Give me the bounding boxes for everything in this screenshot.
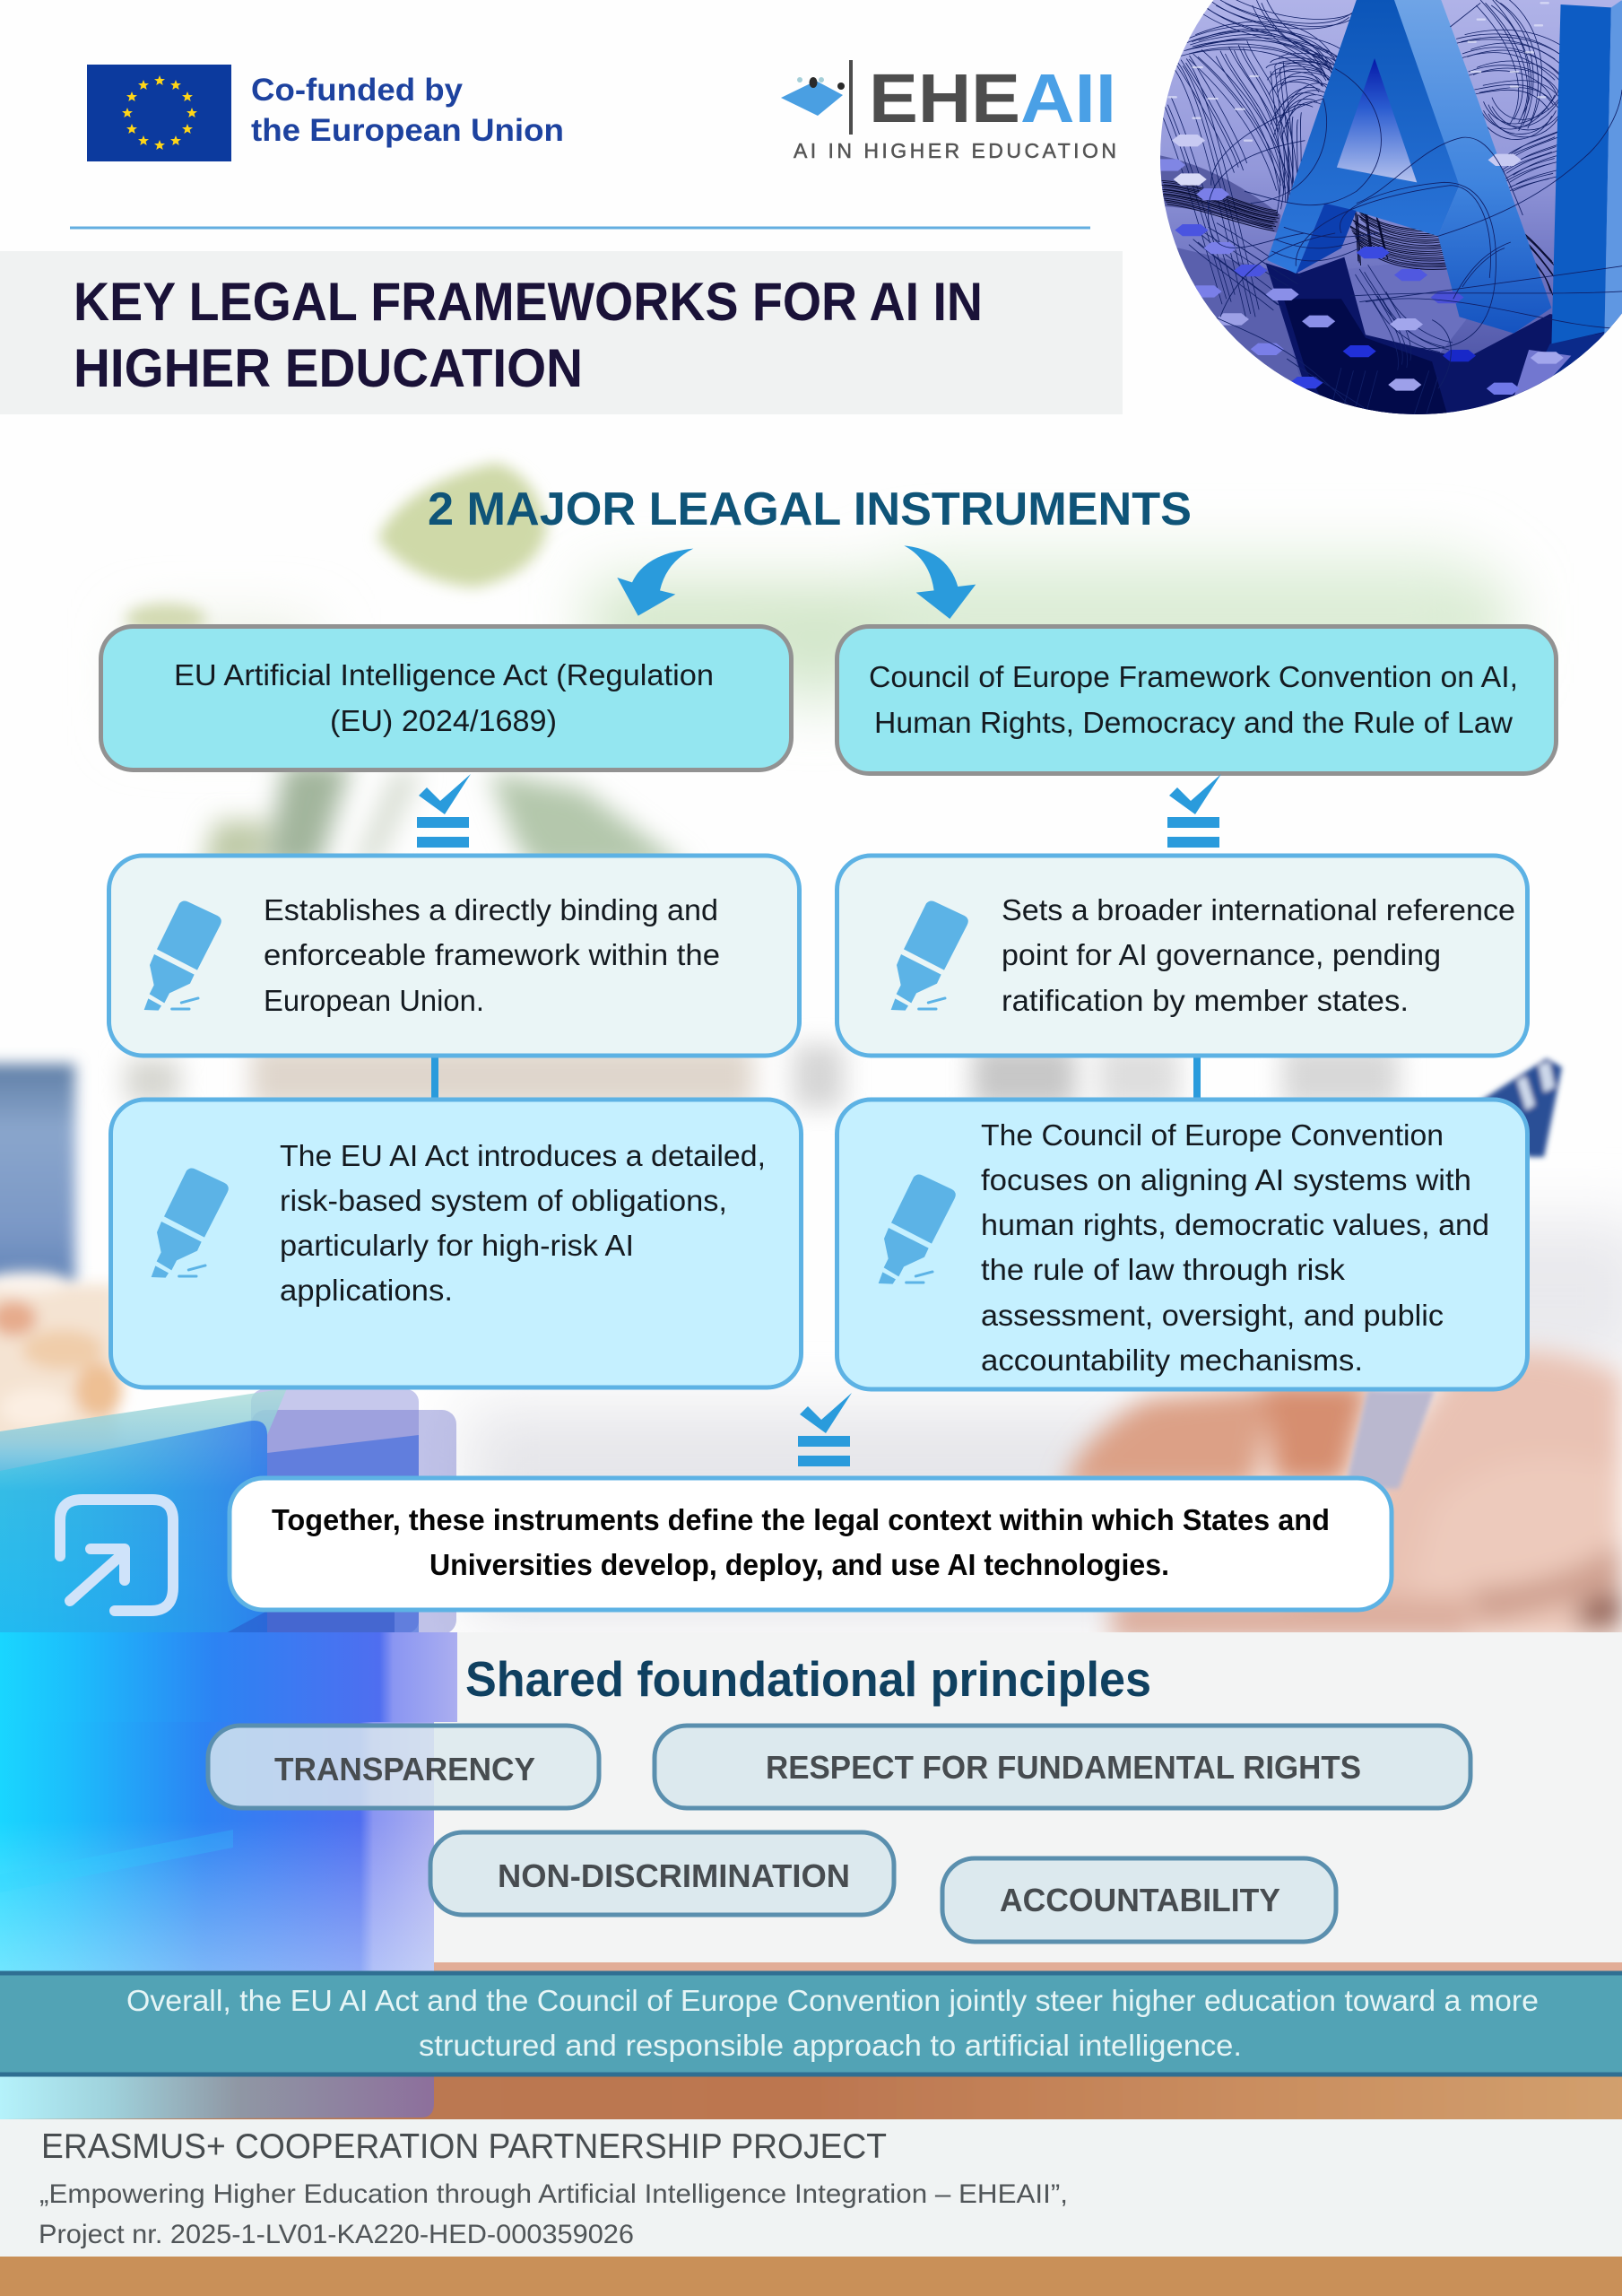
decorative blue gradient panel	[0, 1388, 457, 2119]
pill: accountability	[942, 1858, 1336, 1942]
text: The Council of Europe Convention	[981, 1118, 1444, 1152]
text: Sets a broader international reference	[1002, 893, 1515, 926]
wordmark: EHE	[869, 60, 1020, 137]
text: the rule of law through risk	[981, 1253, 1346, 1286]
left letter A	[1267, 0, 1460, 274]
text: risk-based system of obligations,	[280, 1184, 727, 1217]
panel: shared principles backdrop	[0, 1632, 1622, 1962]
panel: Council of Europe Convention	[837, 626, 1557, 773]
icon: highlighter	[144, 900, 221, 1011]
banner: overall conclusion: Overall, the EU AI Act and the Council of Europe Convention jointly steer higher education toward a more	[126, 1984, 1539, 2017]
text: European Union.	[264, 984, 484, 1017]
connector left	[431, 1057, 438, 1100]
pill: non-discrimination	[430, 1832, 894, 1915]
background: wooden desk strip	[6, 1962, 1622, 2119]
panel: EU risk-based system	[111, 1100, 802, 1387]
panel: Council reference point	[837, 856, 1528, 1056]
arrow: to EU AI Act	[617, 549, 693, 616]
tagline: AI IN HIGHER EDUCATION	[794, 139, 1116, 162]
icon: arrow in rounded square	[60, 1500, 173, 1611]
dark band and floor	[1159, 155, 1280, 233]
flowing wire lines over letters	[1208, 3, 1622, 419]
icon: check equals left	[417, 774, 471, 848]
hexagon dots	[1152, 135, 1564, 395]
arrow: to Council of Europe Convention	[904, 545, 976, 619]
wordmark: AII	[1020, 60, 1116, 137]
text: accountability mechanisms.	[981, 1344, 1363, 1377]
text: assessment, oversight, and public	[981, 1299, 1444, 1332]
text	[1002, 893, 1515, 1017]
background: blue mug	[0, 1064, 75, 1283]
banner: overall conclusion: structured and responsible approach to artificial intelligence.	[419, 2029, 1242, 2062]
panel: EU AI Act: EU Artificial Intelligence Act (Regulation	[174, 658, 714, 691]
circular AI image	[1152, 0, 1622, 424]
heading: 2 major instruments: 2 MAJOR LEAGAL INSTRUMENTS	[428, 483, 1192, 535]
footer panel: project information	[0, 2119, 1622, 2257]
footer panel: project information: „Empowering Higher Education through Artificial Intelligence Integration – EHEAII”,	[39, 2179, 1068, 2209]
pill: non-discrimination: NON-DISCRIMINATION	[498, 1857, 850, 1894]
text: particularly for high-risk AI	[280, 1229, 634, 1262]
text	[280, 1139, 766, 1307]
text: enforceable framework within the	[264, 938, 720, 971]
panel: EU AI Act	[100, 626, 791, 770]
divider	[70, 226, 1090, 230]
callout: legal context	[230, 1478, 1392, 1610]
logo: EHEAII	[781, 60, 1116, 162]
panel: EU binding framework	[109, 856, 800, 1056]
callout: legal context: Universities develop, deploy, and use AI technologies.	[429, 1548, 1169, 1581]
panel: Council of Europe Convention: Council of Europe Framework Convention on AI,	[869, 660, 1518, 693]
text	[264, 893, 720, 1017]
title: HIGHER EDUCATION	[74, 338, 583, 398]
pill: respect for fundamental rights	[655, 1726, 1470, 1808]
text: focuses on aligning AI systems with	[981, 1163, 1471, 1196]
title: KEY LEGAL FRAMEWORKS FOR AI IN	[74, 272, 983, 332]
background: writing hand	[1063, 1351, 1622, 1641]
icon: highlighter	[879, 1174, 956, 1284]
background: pastry	[0, 1272, 122, 1446]
panel: Council human rights focus	[837, 1100, 1528, 1389]
EU flag	[87, 65, 231, 161]
pill: accountability: ACCOUNTABILITY	[1000, 1882, 1280, 1918]
background: pen	[1345, 1058, 1562, 1489]
logo: EU flag with co-funded label	[87, 65, 564, 161]
icon: check equals right	[1167, 774, 1221, 848]
text: Establishes a directly binding and	[264, 893, 718, 926]
icon: highlighter	[891, 900, 968, 1011]
logo mark	[781, 60, 853, 135]
co-funded text: Co-funded by	[251, 73, 464, 108]
text: applications.	[280, 1274, 453, 1307]
text: point for AI governance, pending	[1002, 938, 1441, 971]
banner: overall conclusion	[0, 1973, 1622, 2074]
text: human rights, democratic values, and	[981, 1208, 1489, 1241]
footer panel: project information: ERASMUS+ COOPERATION PARTNERSHIP PROJECT	[41, 2127, 887, 2166]
co-funded text	[251, 73, 564, 148]
pale light dashes	[1169, 3, 1548, 141]
wires behind letters	[1158, 0, 1567, 370]
connector right	[1193, 1057, 1201, 1100]
pill: respect for fundamental rights: RESPECT FOR FUNDAMENTAL RIGHTS	[766, 1749, 1361, 1786]
text: The EU AI Act introduces a detailed,	[280, 1139, 766, 1172]
panel: Council of Europe Convention: Human Rights, Democracy and the Rule of Law	[874, 706, 1513, 739]
pill: transparency: TRANSPARENCY	[274, 1751, 535, 1787]
title	[74, 272, 983, 398]
text	[981, 1118, 1489, 1377]
title panel	[0, 251, 1123, 414]
callout: legal context: Together, these instruments define the legal context within which States and	[272, 1503, 1330, 1536]
co-funded text: the European Union	[251, 113, 564, 148]
icon: check equals center	[798, 1393, 852, 1466]
right letter I	[1551, 4, 1611, 344]
pill: transparency	[208, 1726, 599, 1808]
text: ratification by member states.	[1002, 984, 1409, 1017]
footer panel: project information: Project nr. 2025-1-LV01-KA220-HED-000359026	[39, 2220, 634, 2249]
panel: EU AI Act: (EU) 2024/1689)	[330, 704, 557, 737]
heading: shared foundational principles: Shared foundational principles	[465, 1651, 1151, 1707]
icon: highlighter	[152, 1168, 229, 1278]
